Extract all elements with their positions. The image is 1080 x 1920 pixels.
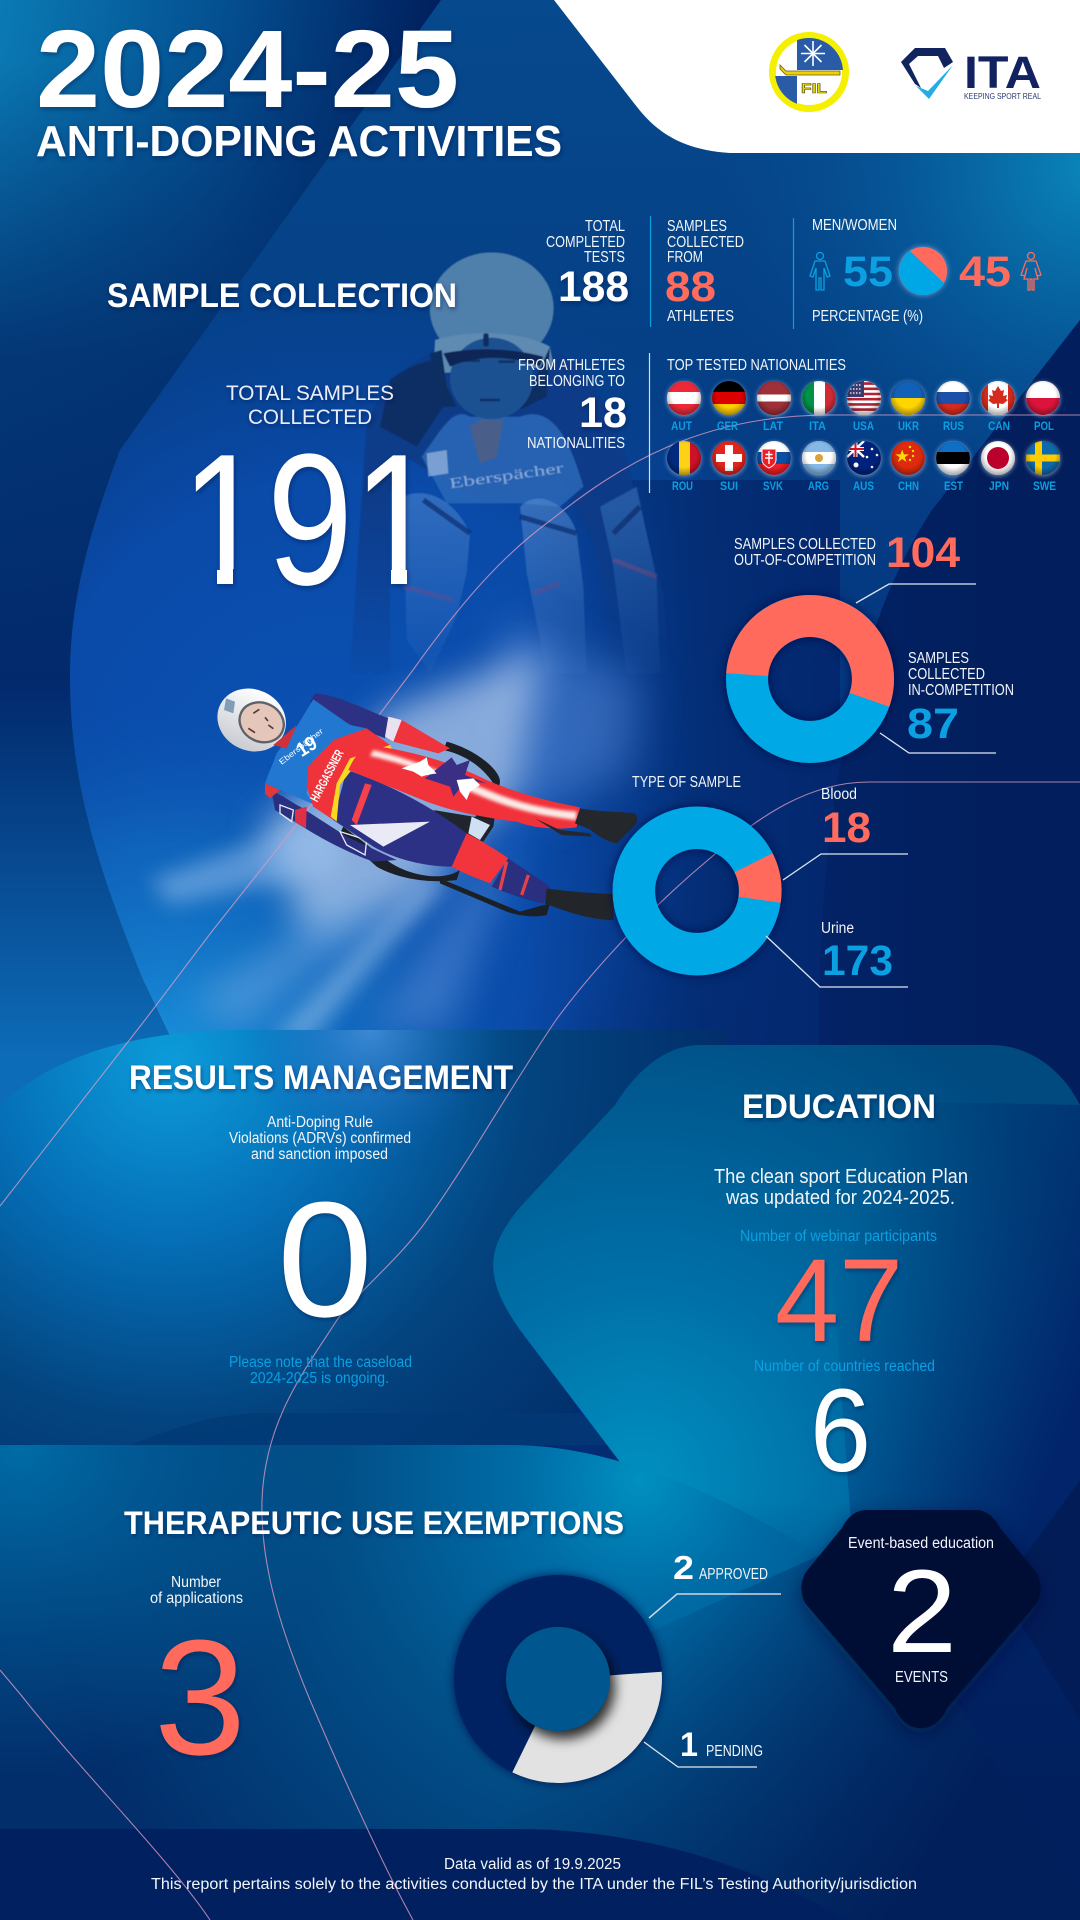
callout: in-competition: 87 (907, 700, 959, 748)
stat: nationalities (518, 357, 627, 452)
flag labels: UKR (898, 421, 920, 433)
flag: Switzerland (712, 441, 746, 475)
flag labels: AUT (671, 421, 692, 433)
flag: Sweden (1026, 441, 1060, 475)
flag labels: CHN (898, 481, 919, 493)
heading: therapeutic use exemptions: THERAPEUTIC USE EXEMPTIONS (124, 1505, 624, 1541)
logo: ITA: ITA (964, 47, 1041, 98)
stat: countries reached: Number of countries reached (754, 1358, 935, 1375)
flag labels: GER (717, 421, 739, 433)
footer text (151, 1856, 917, 1893)
flag: Italy (802, 381, 836, 415)
stat: men women: 45 (959, 248, 1011, 296)
callout: blood (783, 786, 908, 880)
heading: sample collection: SAMPLE COLLECTION (107, 277, 457, 315)
athlete on luge (207, 677, 637, 920)
stat: total samples collected (195, 386, 410, 590)
stat: number of applications: Number (171, 1574, 221, 1591)
athlete near arm (310, 693, 388, 738)
white logo panel (554, 0, 1080, 153)
text: ADRV description: Anti-Doping Rule (267, 1114, 373, 1131)
decorative curve lines (0, 415, 1080, 1920)
flag labels: LAT (763, 421, 783, 433)
text: education plan: was updated for 2024-2025. (725, 1187, 955, 1209)
stat: nationalities: 18 (579, 389, 627, 437)
stat: webinar participants: Number of webinar participants (740, 1228, 937, 1245)
flag labels: EST (944, 481, 963, 493)
stat: nationalities: FROM ATHLETES (518, 357, 625, 374)
text: ADRV description: Violations (ADRVs) confirmed (229, 1130, 411, 1147)
stat: number of applications: of applications (150, 1590, 243, 1607)
callout: out-of-competition: 104 (886, 529, 960, 577)
flag: Romania (667, 441, 701, 475)
callout: blood: 18 (822, 804, 871, 852)
callout: out-of-competition: SAMPLES COLLECTED (734, 536, 876, 553)
top tested nationalities flags (667, 357, 1060, 493)
stat: men women: PERCENTAGE (%) (812, 308, 923, 325)
athlete torso (265, 699, 367, 805)
athlete sled (340, 742, 550, 916)
callout: urine: Urine (821, 920, 854, 937)
logo: FIL (770, 36, 847, 112)
athlete boot (575, 808, 637, 843)
flag labels: ITA (809, 421, 826, 433)
stat: men women: MEN/WOMEN (812, 217, 897, 234)
flag labels: SVK (763, 481, 784, 493)
note: caseload: Please note that the caseload (229, 1354, 412, 1371)
footer band (0, 1829, 847, 1920)
footer text: This report pertains solely to the activities conducted by the ITA under the FIL’s Testing Authority/jurisdiction (151, 1876, 917, 1893)
callout: pending (644, 1726, 763, 1767)
callout: urine (766, 920, 908, 987)
heading: type of sample: TYPE OF SAMPLE (632, 774, 741, 791)
athlete on luge: 19 (293, 732, 321, 762)
callout: approved (649, 1549, 781, 1618)
flag labels: RUS (943, 421, 964, 433)
flag labels: ROU (672, 481, 693, 493)
stat: samples from athletes: ATHLETES (667, 308, 734, 325)
chart: type of sample donut (634, 828, 782, 954)
stat: samples from athletes: FROM (667, 249, 703, 266)
athlete far leg (333, 770, 467, 867)
flag: Latvia (757, 381, 791, 415)
icon: man (810, 252, 830, 290)
callout: in-competition: IN-COMPETITION (908, 682, 1014, 699)
note: caseload (229, 1354, 412, 1387)
stat: men women (810, 217, 1041, 325)
heading: education: EDUCATION (742, 1088, 936, 1126)
chart: samples collected donut (726, 595, 894, 742)
stat: ADRVs zero: 0 (277, 1168, 373, 1351)
flag: Argentina (802, 441, 836, 475)
logo: ITA: KEEPING SPORT REAL (964, 91, 1041, 101)
text: ADRV description (229, 1114, 411, 1163)
logo: ITA (901, 47, 1041, 101)
text: ADRV description: and sanction imposed (251, 1146, 388, 1163)
stat: webinar participants (740, 1228, 937, 1367)
flag: Slovakia (757, 441, 791, 475)
stat: total completed tests: COMPLETED (546, 234, 625, 251)
flag: Estonia (936, 441, 970, 475)
panel: event-based education (801, 1510, 1041, 1728)
chart: men women pie (899, 247, 947, 295)
logo: FIL: FIL (801, 80, 828, 96)
callout: pending: 1 (680, 1726, 698, 1764)
flag labels: SUI (720, 481, 738, 493)
panel: education (493, 1045, 1080, 1920)
callout: blood: Blood (821, 786, 857, 803)
heading: results management: RESULTS MANAGEMENT (129, 1059, 513, 1097)
dividers (650, 216, 794, 493)
title: ANTI-DOPING ACTIVITIES (36, 117, 562, 166)
flag: USA (847, 381, 881, 415)
athlete helmet (207, 677, 296, 763)
stat: samples from athletes: SAMPLES (667, 218, 727, 235)
flag: Poland (1026, 381, 1060, 415)
panel: event-based education: 2 (887, 1546, 957, 1678)
stat: countries reached (754, 1358, 935, 1497)
callout: in-competition: SAMPLES (908, 650, 969, 667)
stat: webinar participants: 47 (775, 1235, 903, 1367)
flag: Russia (936, 381, 970, 415)
flag: Germany (712, 381, 746, 415)
panel: event-based education: Event-based education (848, 1535, 994, 1552)
flag: Australia (847, 441, 881, 475)
title (36, 8, 562, 166)
flag labels: CAN (988, 421, 1010, 433)
callout: out-of-competition: OUT-OF-COMPETITION (734, 552, 876, 569)
note: caseload: 2024-2025 is ongoing. (250, 1370, 389, 1387)
flag labels: SWE (1033, 481, 1056, 493)
callout: pending: PENDING (706, 1743, 763, 1760)
ghost athlete photo: Eberspächer (448, 460, 565, 492)
icon: woman (1021, 252, 1041, 290)
flag: Japan (981, 441, 1015, 475)
callout: out-of-competition (734, 529, 976, 603)
stat: nationalities: BELONGING TO (529, 373, 625, 390)
stat: total completed tests (546, 218, 629, 311)
ghost athlete photo (350, 252, 670, 673)
athlete far arm (272, 792, 397, 862)
flag labels: USA (853, 421, 874, 433)
top tested nationalities flags: TOP TESTED NATIONALITIES (667, 357, 846, 374)
callout: in-competition (880, 650, 1014, 753)
flag labels: POL (1034, 421, 1054, 433)
flag: China (891, 441, 925, 475)
athlete on luge: HARGASSNER (308, 747, 347, 804)
callout: in-competition: COLLECTED (908, 666, 985, 683)
footer text: Data valid as of 19.9.2025 (444, 1856, 621, 1873)
stat: countries reached: 6 (810, 1365, 871, 1497)
athlete near leg (348, 745, 580, 829)
flag: Austria (667, 381, 701, 415)
stat: total completed tests: TESTS (584, 249, 625, 266)
flag labels: AUS (853, 481, 874, 493)
athlete on luge: Eberspächer (277, 726, 325, 767)
panel: results management (0, 1030, 730, 1445)
stat: samples from athletes: 88 (665, 263, 716, 311)
stat: number of applications: 3 (154, 1606, 246, 1789)
panel: therapeutic use exemptions (0, 1445, 1080, 1920)
stat: total samples collected: TOTAL SAMPLES (226, 382, 394, 405)
light beam (150, 620, 640, 1040)
callout: urine: 173 (822, 937, 893, 985)
stat: samples from athletes (665, 218, 744, 325)
chart: TUE donut (480, 1601, 662, 1783)
panel: event-based education: EVENTS (895, 1669, 948, 1686)
title: 2024-25 (36, 8, 459, 131)
stat: total completed tests: 188 (558, 263, 629, 311)
stat: total completed tests: TOTAL (585, 218, 625, 235)
stat: samples from athletes: COLLECTED (667, 234, 744, 251)
text: education plan (714, 1166, 968, 1209)
flag: Ukraine (891, 381, 925, 415)
flag labels: JPN (989, 481, 1009, 493)
flag labels: ARG (808, 481, 829, 493)
stat: total samples collected: 191 (181, 415, 439, 624)
callout: approved: 2 (673, 1549, 694, 1586)
callout: approved: APPROVED (699, 1566, 768, 1583)
flag labels (671, 421, 1056, 493)
text: education plan: The clean sport Education Plan (714, 1166, 968, 1188)
stat: men women: 55 (843, 248, 893, 296)
flag: Canada (981, 381, 1015, 415)
stat: total samples collected: COLLECTED (248, 406, 372, 429)
stat: nationalities: NATIONALITIES (527, 435, 625, 452)
